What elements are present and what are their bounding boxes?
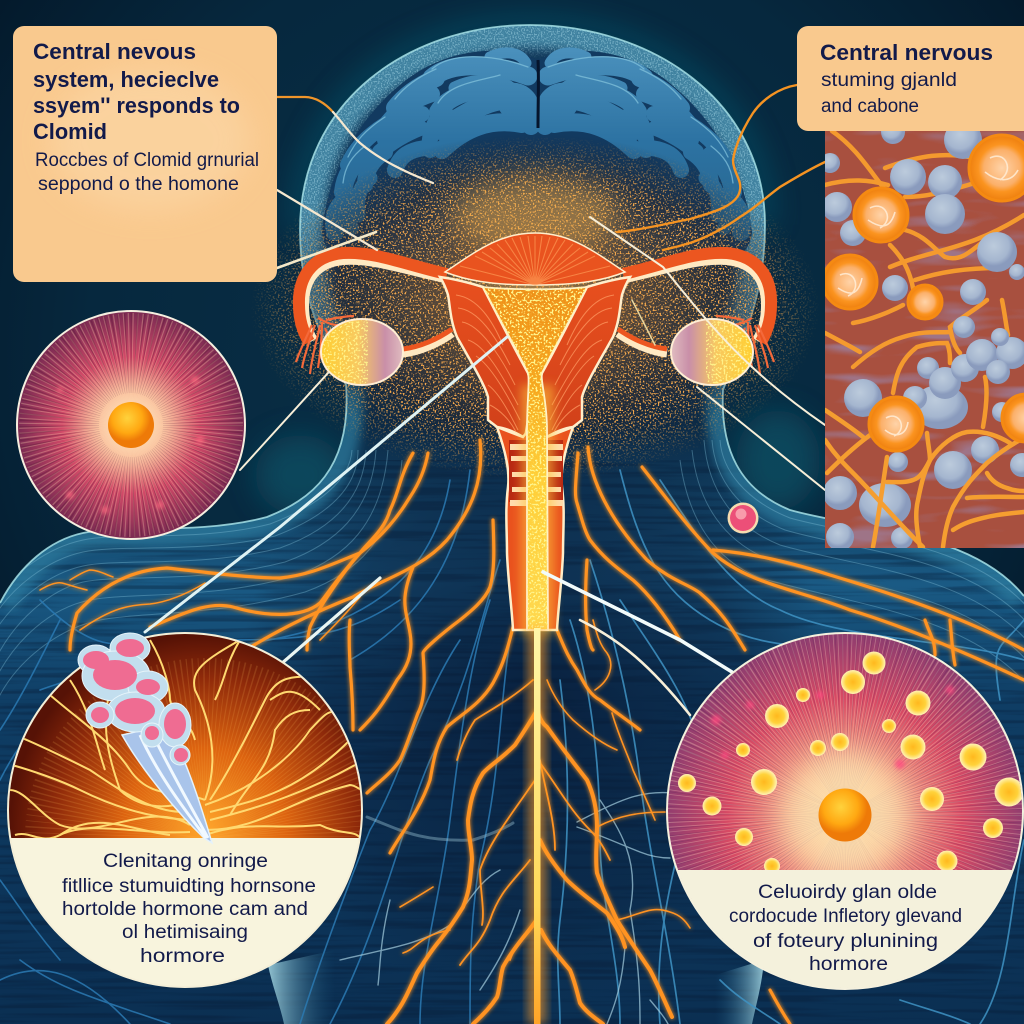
haze — [273, 133, 797, 463]
label body: and cabone — [821, 96, 919, 117]
ovarian ligaments — [403, 333, 667, 353]
pink sparks — [711, 686, 954, 769]
inset circle: follicles radiating — [660, 625, 1024, 1000]
right ovary sparkle — [706, 320, 752, 384]
stem highlights — [140, 735, 208, 838]
column glow — [521, 385, 554, 635]
pointer: tissue white lower — [697, 387, 825, 490]
pointer: tissue white upper — [590, 217, 825, 425]
right muscle wall — [540, 277, 630, 438]
golden particle cloud — [254, 138, 817, 478]
panel: tissue micrograph — [820, 120, 1024, 551]
orange cells — [823, 135, 1024, 451]
pointer: tube strand — [632, 300, 655, 345]
label heading: Central nevous — [33, 39, 196, 64]
label heading: Central nervous — [820, 40, 993, 65]
caption: left circle: fitllice stumuidting hornsone — [62, 876, 316, 897]
rays — [740, 710, 950, 920]
pointer: column to right circle upper — [543, 572, 732, 672]
blue nerve bundle, right — [558, 470, 1024, 1024]
trunk — [534, 628, 540, 1024]
torso light streak right — [722, 964, 763, 1024]
grey spheres — [820, 120, 1024, 551]
right ovary — [671, 319, 753, 385]
circle border — [17, 311, 245, 539]
label body: seppond o the homone — [38, 174, 239, 195]
panel: upper-left label — [13, 26, 277, 282]
label heading: Clomid — [33, 119, 107, 144]
centre ball — [818, 788, 872, 842]
label box — [13, 26, 277, 282]
left orange nerves — [70, 440, 513, 853]
right orange nerves — [557, 447, 1024, 1024]
radial rays — [57, 353, 204, 514]
caption: right circle: Celuoirdy glan olde — [758, 882, 937, 903]
muscle wall striations — [456, 295, 614, 432]
pointer: left box to brain orange — [277, 97, 333, 112]
torso light streak left — [268, 953, 326, 1024]
trunk glow — [528, 628, 546, 1024]
centre light — [783, 753, 907, 877]
label heading — [33, 39, 240, 144]
pointer: left box to brain cream — [333, 112, 433, 183]
left muscle wall — [440, 277, 530, 438]
label body — [35, 150, 259, 195]
circle base — [8, 633, 362, 987]
pituitary lobes — [78, 633, 191, 765]
label body: stuming gjanld — [821, 70, 957, 91]
caption: left circle: Clenitang onringe — [103, 851, 268, 872]
panel: upper-right label — [797, 26, 1024, 131]
cervix — [497, 427, 573, 630]
cell swirl highlights — [838, 156, 1018, 436]
circle base — [667, 633, 1023, 989]
central thin branches — [457, 680, 610, 965]
pointer: left box to left tube — [277, 232, 376, 268]
central branches — [387, 712, 672, 1024]
right hemisphere gyri — [545, 53, 742, 232]
caption: right circle: of foteury plunining — [753, 931, 938, 952]
label body — [821, 70, 957, 117]
caption: left circle: ol hetimisaing — [122, 922, 248, 943]
pink follicles — [83, 639, 188, 762]
tissue texture — [825, 131, 1024, 548]
pale nerve threads — [340, 792, 673, 1024]
left thin orange nerves — [40, 570, 450, 953]
yellow follicles — [678, 652, 1024, 874]
pituitary stem — [122, 725, 212, 843]
brain base — [322, 51, 752, 272]
head shell stipple — [301, 26, 764, 392]
pointer: lower-left circle — [197, 578, 380, 737]
label highlight — [50, 70, 250, 210]
caption: right circle: hormore — [809, 954, 888, 975]
caption: right circle — [729, 882, 962, 975]
label heading: ssyem'' responds to — [33, 93, 240, 118]
warm core — [450, 177, 620, 253]
pointer: tissue orange — [663, 162, 825, 250]
label body: Roccbes of Clomid grnurial — [35, 150, 259, 171]
pointer: right box orange — [617, 85, 797, 232]
right tube — [623, 253, 774, 374]
pointer: column to right circle lower — [580, 620, 690, 715]
head shell — [300, 25, 765, 390]
fundus ribs — [460, 236, 610, 285]
centre ball — [108, 402, 154, 448]
caption: right circle: cordocude Infletory glevand — [729, 906, 962, 927]
left fimbriae — [296, 316, 354, 374]
shoulder contour lines, left — [0, 450, 402, 705]
cavity sparkle texture — [480, 285, 590, 635]
inset circle: receptor burst — [17, 311, 245, 539]
fundus — [445, 233, 625, 285]
dark rays — [740, 710, 950, 920]
cervix rings — [509, 440, 563, 506]
blue nerve bundle, left — [0, 470, 510, 1024]
pointer: left ovary to circle — [240, 373, 328, 470]
pink cell marker — [728, 502, 758, 534]
uterine cavity and column — [483, 287, 587, 630]
right thin orange nerves — [547, 620, 690, 928]
brain — [322, 51, 752, 272]
nerves: orange — [40, 440, 1024, 1024]
tissue ground — [825, 131, 1024, 548]
pointer lines — [145, 85, 825, 737]
ligaments inner — [403, 329, 667, 349]
glow: teal around head and neck — [255, 25, 820, 515]
caption: left circle: hortolde hormone cam and — [62, 899, 308, 920]
nerves: blue — [0, 470, 1024, 1024]
body outline — [0, 25, 1024, 603]
left ovary — [321, 319, 403, 385]
left ovary sparkle — [322, 320, 368, 384]
orange fibres over spheres — [825, 410, 1024, 547]
pink burst field — [660, 625, 1024, 1000]
left hemisphere gyri — [334, 53, 531, 232]
orange field — [9, 634, 361, 838]
brain midline — [536, 60, 540, 128]
shoulder contour lines, right — [680, 440, 1024, 688]
left tube — [296, 253, 447, 374]
shoulder rim shade — [0, 385, 347, 603]
particles — [254, 138, 817, 478]
caption ground — [678, 870, 1012, 988]
caption: left circle — [62, 851, 316, 967]
yellow nerve fan — [10, 640, 362, 839]
label heading: system, hecieclve — [33, 67, 219, 92]
label box — [797, 26, 1024, 131]
pointer: uterus to lower-left — [145, 337, 507, 632]
uterus and ovaries — [296, 233, 774, 635]
pituitary gland — [78, 633, 212, 843]
sparks — [57, 376, 204, 514]
caption: left circle: hormore — [140, 946, 225, 967]
inset circle: pituitary with nerve signals — [0, 630, 370, 987]
pointer: left box to head — [277, 190, 377, 250]
orange fibres under spheres — [825, 131, 1024, 427]
right fimbriae — [716, 316, 774, 374]
central nerve trunk — [528, 628, 546, 1024]
gyri highlights — [343, 57, 733, 183]
